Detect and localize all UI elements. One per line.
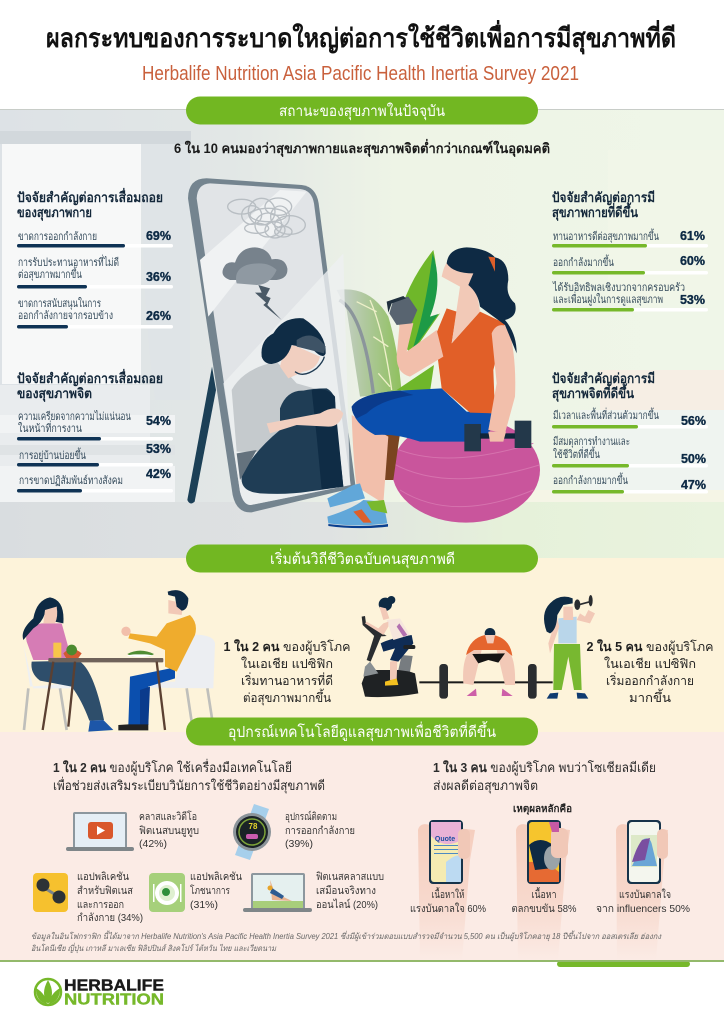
text: healthy eating statistic: ต่อสุขภาพมากขึ้น [243, 688, 331, 706]
bar: lack of support 26% [17, 297, 173, 328]
bar: lack of exercise 69%: 69% [146, 229, 171, 243]
heading: ของสุขภาพกาย [17, 205, 92, 221]
text: technology statistic: เพื่อช่วยส่งเสริมระเบียบวินัยการใช้ชีวิตอย่างมีสุขภาพดี [53, 777, 325, 794]
footnote: อินโดนีเซีย ญี่ปุ่น เกาหลี มาเลเซีย ฟิลิปปินส์ สิงคโปร์ ไต้หวัน ไทย และเวียดนาม [31, 942, 277, 954]
icon: phone with comedy [516, 820, 570, 960]
barbell and man [419, 628, 553, 699]
bar: positive influence 53%: และเพื่อนฝูงในการดูแลสุขภาพ [553, 291, 663, 306]
woman with dumbbell [544, 595, 595, 699]
shoes [327, 483, 388, 528]
panel: mental improvement factors [552, 371, 708, 494]
item: YouTube fitness: (42%) [139, 838, 167, 850]
bar: work-life balance 50%: มีสมดุลการทำงานและ [553, 435, 630, 448]
bar: more exercise 60%: 60% [680, 254, 705, 268]
text: technology statistic: 1 ใน 2 คน ของผู้บริโภค ใช้เครื่องมือเทคโนโลยี [53, 759, 292, 776]
illustration: couple eating [23, 590, 215, 732]
raised dumbbell [389, 297, 417, 325]
text: main reasons heading: เหตุผลหลักคือ [513, 803, 572, 815]
text: social media statistic [433, 759, 656, 794]
bar: staying home 53%: 53% [146, 442, 171, 456]
panel: mental decline factors [17, 368, 173, 492]
text: exercise statistic: เริ่มออกกำลังกาย [606, 672, 694, 688]
item: nutrition apps: (31%) [190, 899, 218, 911]
heading: ปัจจัยสำคัญต่อการมี [552, 190, 655, 206]
heading: ปัจจัยสำคัญต่อการมี [552, 371, 655, 387]
raised arm [397, 320, 443, 377]
bar: poor diet 36%: ต่อสุขภาพมากขึ้น [18, 266, 82, 281]
icon: dumbbell tile [33, 873, 68, 912]
icon: plate tile [149, 873, 185, 912]
lowered dumbbell [464, 421, 531, 451]
bar: personal time 56%: มีเวลาและพื้นที่ส่วนตัวมากขึ้น [553, 407, 659, 422]
exercise bike and rider [362, 596, 418, 697]
icon: exercise ball [383, 417, 540, 523]
text: social media statistic: ส่งผลดีต่อสุขภาพจิต [433, 778, 538, 794]
bar: work stress 54% [17, 410, 173, 440]
heading: ปัจจัยสำคัญต่อการเสื่อมถอย [17, 368, 163, 387]
logo: Herbalife Nutrition: NUTRITION [64, 992, 164, 1008]
bar: work stress 54%: ความเครียดจากความไม่แน่นอน [18, 410, 131, 423]
icon: phone with quote: Quote [435, 836, 455, 843]
bar: healthy eating 61%: 61% [680, 229, 705, 243]
bar: exercise more 47% [552, 472, 708, 494]
bar: poor diet 36%: 36% [146, 270, 171, 284]
text: exercise statistic: ในเอเชีย แปซิฟิก [604, 657, 696, 671]
blue shorts [352, 388, 495, 442]
icon: mirror [188, 178, 356, 512]
panel: technology background [0, 732, 724, 961]
bar: lack of exercise 69% [17, 229, 173, 248]
table with food [43, 643, 165, 730]
heading: สุขภาพจิตที่ดีขึ้น [552, 383, 635, 402]
heading: ของสุขภาพจิต [17, 386, 92, 402]
bar: personal time 56%: 56% [681, 414, 706, 428]
woman [23, 597, 113, 732]
item: YouTube fitness [66, 810, 199, 851]
caption: influencer inspiration [596, 888, 690, 915]
section pill: healthy lifestyle: เริ่มต้นวิถีชีวิตฉบับคนสุขภาพดี [270, 548, 455, 569]
section pill: healthy lifestyle [186, 544, 538, 572]
item: fitness tracker: อุปกรณ์ติดตาม [285, 810, 337, 823]
caption: funny content: เนื้อหา [532, 887, 556, 901]
bar: staying home 53% [17, 442, 173, 466]
bar: work-life balance 50%: ใช้ชีวิตที่ดีขึ้น [553, 446, 600, 461]
bar: exercise more 47%: 47% [681, 478, 706, 492]
icon: sad woman [232, 318, 343, 494]
footer rule and tab [0, 960, 724, 967]
neck and face [442, 255, 480, 343]
bar: work-life balance 50%: 50% [681, 452, 706, 466]
bar: work stress 54%: ในหน้าที่การงาน [18, 420, 82, 435]
heading: สุขภาพกายที่ดีขึ้น [552, 202, 639, 221]
bar: lack of social interaction 42% [17, 467, 173, 492]
text: exercise statistic [586, 639, 714, 705]
bar: lack of social interaction 42%: การขาดปฏิสัมพันธ์ทางสังคม [19, 474, 123, 487]
bar: lack of social interaction 42%: 42% [146, 467, 171, 481]
bar: more exercise 60% [552, 254, 708, 274]
text: healthy eating statistic [224, 639, 350, 706]
orange top [435, 308, 505, 413]
item: fitness tracker: (39%) [285, 838, 313, 850]
caption: influencer inspiration: จาก influencers 50% [596, 903, 690, 915]
caption: funny content [512, 887, 576, 915]
item: virtual fitness classes: เสมือนจริงทาง [316, 884, 376, 897]
bar: more exercise 60%: ออกกำลังมากขึ้น [553, 254, 614, 269]
bar: positive influence 53%: ได้รับอิทธิพลเชิงบวกจากครอบครัว [552, 281, 685, 294]
section pill: current health [186, 96, 538, 124]
text: social media statistic: 1 ใน 3 คน ของผู้บริโภค พบว่าโซเชียลมีเดีย [433, 759, 656, 776]
text: exercise statistic: มากขึ้น [629, 688, 671, 705]
caption: inspiring content [410, 887, 486, 915]
bar: lack of support 26%: ขาดการสนับสนุนในการ [18, 297, 101, 310]
caption: inspiring content: แรงบันดาลใจ 60% [410, 902, 486, 915]
icon: phone with quote [418, 820, 475, 960]
section pill: current health: สถานะของสุขภาพในปัจจุบัน [279, 102, 445, 121]
illustration: mirror and exercising woman [187, 178, 540, 528]
bar: lack of support 26%: ออกกำลังกายจากรอบข้าง [18, 310, 113, 322]
item: fitness apps: และการออก [77, 899, 124, 911]
icon: laptop with yoga [243, 873, 312, 912]
bar: poor diet 36% [17, 254, 173, 288]
icon: tangled scribble [228, 198, 305, 238]
bar: healthy eating 61% [552, 228, 708, 248]
item: virtual fitness classes: ออนไลน์ (20%) [316, 898, 378, 911]
illustration: people exercising [362, 595, 595, 699]
text: healthy eating statistic: เริ่มทานอาหารที่ดี [241, 672, 333, 688]
text: healthy eating statistic: ในเอเชีย แปซิฟิก [241, 657, 333, 671]
item: fitness tracker: การออกกำลังกาย [285, 825, 355, 837]
item: nutrition apps: แอปพลิเคชัน [190, 871, 242, 883]
bar: work stress 54%: 54% [146, 414, 171, 428]
bar: lack of support 26%: 26% [146, 309, 171, 323]
item: YouTube fitness: คลาสและวิดีโอ [139, 810, 197, 823]
heading: ปัจจัยสำคัญต่อการเสื่อมถอย [17, 187, 163, 206]
item: fitness apps [33, 871, 143, 924]
icon: fit woman [327, 247, 531, 528]
footnote [31, 930, 662, 954]
bar: positive influence 53%: 53% [680, 293, 705, 307]
item: fitness apps: กำลังกาย (34%) [77, 912, 143, 924]
bar: personal time 56% [552, 407, 708, 428]
item: fitness apps: สำหรับฟิตเนส [77, 885, 134, 897]
caption: inspiring content: เนื้อหาให้ [432, 887, 465, 901]
text: technology statistic [53, 759, 325, 794]
bar: healthy eating 61%: ทานอาหารดีต่อสุขภาพมากขึ้น [553, 228, 659, 243]
icon: plant [337, 250, 440, 397]
bar: work-life balance 50% [552, 435, 708, 468]
icon: mirror stand [187, 367, 216, 503]
legs [352, 415, 388, 503]
panel: current health status background [0, 109, 724, 558]
item: virtual fitness classes [243, 871, 384, 912]
item: nutrition apps [149, 871, 242, 912]
hair [447, 247, 517, 353]
item: fitness apps: แอปพลิเคชัน [77, 871, 129, 883]
logo: Herbalife Nutrition: HERBALIFE [64, 978, 164, 994]
icon: leaf emblem [35, 979, 61, 1005]
bar: lack of exercise 69%: ขาดการออกกำลังกาย [18, 231, 97, 243]
item: virtual fitness classes: ฟิตเนสคลาสแบบ [316, 871, 384, 883]
icon: laptop with play button [66, 812, 134, 851]
icon: smartwatch: 78 [249, 822, 258, 831]
subtitle: Herbalife Nutrition Asia Pacific Health Inertia Survey 2021 [142, 63, 579, 85]
logo: Herbalife Nutrition [35, 978, 164, 1008]
chairs [23, 635, 215, 730]
caption: funny content: ตลกขบขัน 58% [512, 903, 576, 915]
headline statistic: 6 ใน 10 คนมองว่าสุขภาพกายและสุขภาพจิตต่ำกว่าเกณฑ์ในอุดมคติ [174, 138, 550, 157]
bar: poor diet 36%: การรับประทานอาหารที่ไม่ดี [18, 254, 119, 269]
bar: positive influence 53% [552, 281, 708, 312]
panel: physical improvement factors [552, 190, 708, 312]
item: YouTube fitness: ฟิตเนสบนยูทูบ [139, 825, 199, 837]
section pill: health technology [186, 718, 538, 746]
text: healthy eating statistic: 1 ใน 2 คน ของผู้บริโภค [224, 639, 350, 655]
text: exercise statistic: 2 ใน 5 คน ของผู้บริโภค [586, 639, 714, 655]
section pill: health technology: อุปกรณ์เทคโนโลยีดูแลสุขภาพเพื่อชีวิตที่ดีขึ้น [228, 721, 496, 742]
item: fitness tracker [233, 804, 355, 860]
panel: physical decline factors [17, 187, 173, 328]
back arm and hand [488, 325, 515, 433]
bar: exercise more 47%: ออกกำลังกายมากขึ้น [553, 472, 628, 487]
caption: influencer inspiration: แรงบันดาลใจ [619, 888, 671, 901]
panel: healthy lifestyle background [0, 558, 724, 732]
footnote: ข้อมูลในอินโฟกราฟิก นี้ได้มาจาก Herbalife Nutrition's Asia Pacific Health Inertia Survey 2021 ซึ่งมีผู้เข้าร่วมตอบแบบสำรวจมีจำนวน 5,500 คน เป็นผู้บริโภคอายุ 18 ปีขึ้นไปจาก ออสเตรเลีย ฮ่องกง [31, 930, 662, 942]
icon: storm cloud [222, 247, 287, 320]
man [118, 590, 196, 730]
bar: staying home 53%: การอยู่บ้านบ่อยขึ้น [19, 447, 86, 462]
icon: phone with influencer [616, 820, 668, 960]
item: nutrition apps: โภชนาการ [190, 884, 230, 897]
